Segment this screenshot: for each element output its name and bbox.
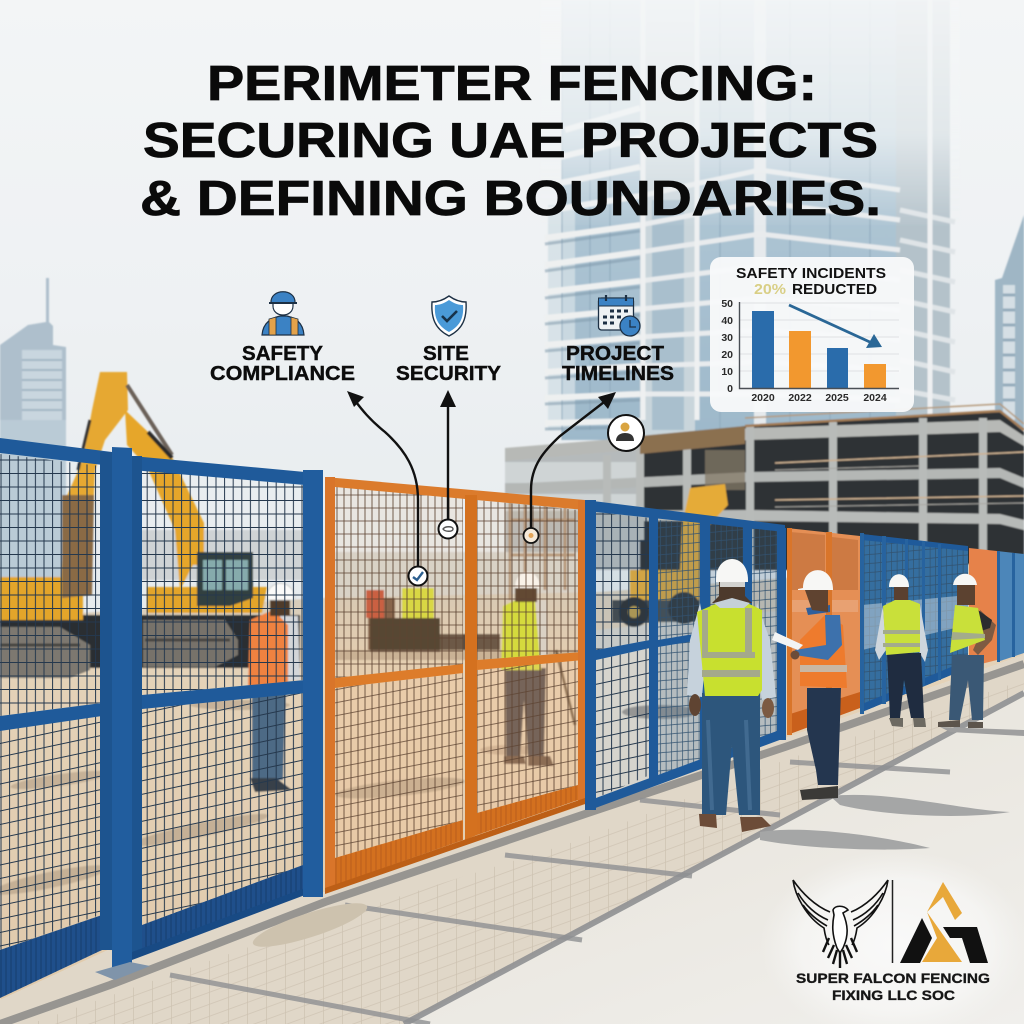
blue fence section 3 (860, 533, 968, 714)
background worker: survey (501, 572, 575, 766)
cast shadow diagonal (404, 693, 1024, 1024)
blue fence panel 2 (132, 456, 323, 960)
arrow: fence to site security (438, 390, 458, 538)
cast rail shadows (170, 762, 950, 1024)
label: safety compliance: SAFETY (242, 342, 323, 365)
orange gate (325, 477, 585, 894)
bar chart (721, 298, 899, 404)
construction podium (505, 404, 1024, 570)
label: safety compliance (210, 342, 355, 385)
bar chart: 50 (721, 298, 733, 310)
callout: project timelines (562, 295, 674, 385)
orange fence section 3 (969, 548, 997, 667)
label: site security (396, 342, 501, 385)
bar chart: 10 (721, 366, 733, 378)
title: & DEFINING BOUNDARIES. (140, 172, 881, 226)
chart title: SAFETY INCIDENTS (736, 265, 886, 282)
icon: calendar and clock (598, 295, 640, 336)
label: site security: SECURITY (396, 362, 501, 385)
bar chart: 30 (721, 332, 733, 344)
ground dirt patches (0, 700, 698, 900)
bar chart: 2022 (788, 392, 812, 404)
callout: safety compliance (210, 292, 355, 385)
paving grid (30, 680, 1024, 1024)
worker with folded arms, yellow vest (938, 574, 996, 728)
logo: super falcon fencing (793, 880, 990, 1003)
trend arrow (789, 305, 882, 348)
chart title: REDUCTED (792, 281, 877, 298)
arrow: fence to project timelines (524, 392, 616, 543)
label: project timelines (562, 342, 674, 385)
company name: FIXING LLC SOC (832, 987, 955, 1003)
blue fence section 4 (997, 551, 1024, 662)
callout: site security (396, 296, 501, 385)
bar chart: 40 (721, 315, 733, 327)
blue fence section 2 (585, 500, 786, 810)
main tower (540, 0, 960, 440)
ground behind fence (0, 560, 1024, 1024)
mid-site machinery (335, 588, 580, 660)
logo divider (892, 880, 894, 963)
worker with plans, orange vest (772, 570, 847, 800)
blue fence panel 1 (0, 438, 112, 998)
arrow: fence to safety compliance (347, 391, 428, 586)
excavator (0, 372, 300, 678)
title (140, 57, 881, 226)
card background (710, 257, 914, 412)
bar chart: 0 (727, 383, 733, 395)
icon: supervisor badge (608, 415, 644, 451)
scaffolding (510, 500, 575, 600)
chart card: safety incidents (710, 257, 914, 412)
worker back view, yellow vest, mid distance (875, 574, 928, 727)
title: PERIMETER FENCING: (207, 57, 817, 111)
company name (796, 970, 990, 1003)
far site haze band (140, 530, 585, 602)
orange fence section 2 (787, 528, 860, 735)
label: safety compliance: COMPLIANCE (210, 362, 355, 385)
background worker: orange vest (248, 584, 300, 792)
left skyscraper (0, 278, 66, 600)
logo glow (760, 850, 1024, 1024)
main blue post (95, 447, 150, 980)
label: site security: SITE (423, 342, 469, 365)
chart title (736, 265, 886, 298)
label: project timelines: TIMELINES (562, 362, 674, 385)
foreground walkway and shadows (0, 655, 1024, 1024)
icon: AS monogram (900, 882, 988, 963)
label: project timelines: PROJECT (566, 342, 664, 365)
worker in yellow vest, back view, closest (687, 559, 776, 832)
title: SECURING UAE PROJECTS (143, 114, 878, 168)
walkway (0, 655, 1024, 1024)
bar chart: 2024 (863, 392, 887, 404)
wheel loader (612, 484, 728, 627)
bar chart: 2025 (825, 392, 849, 404)
foreground workers (687, 559, 996, 832)
sand strip along fence (0, 655, 1024, 1024)
bar chart: 2020 (751, 392, 775, 404)
icon: construction worker (262, 292, 304, 335)
chart title: 20% (754, 281, 786, 298)
fence line (0, 438, 1024, 998)
cool ground through blue section (596, 610, 785, 810)
worker shadows (830, 795, 1010, 816)
company name: SUPER FALCON FENCING (796, 970, 990, 986)
right skyscraper (995, 215, 1024, 430)
fence shadow along base (0, 664, 1024, 1024)
icon: shield with check (432, 296, 466, 336)
disturbed sand mound (249, 895, 371, 955)
icon: falcon (793, 880, 888, 968)
bar chart: 20 (721, 349, 733, 361)
